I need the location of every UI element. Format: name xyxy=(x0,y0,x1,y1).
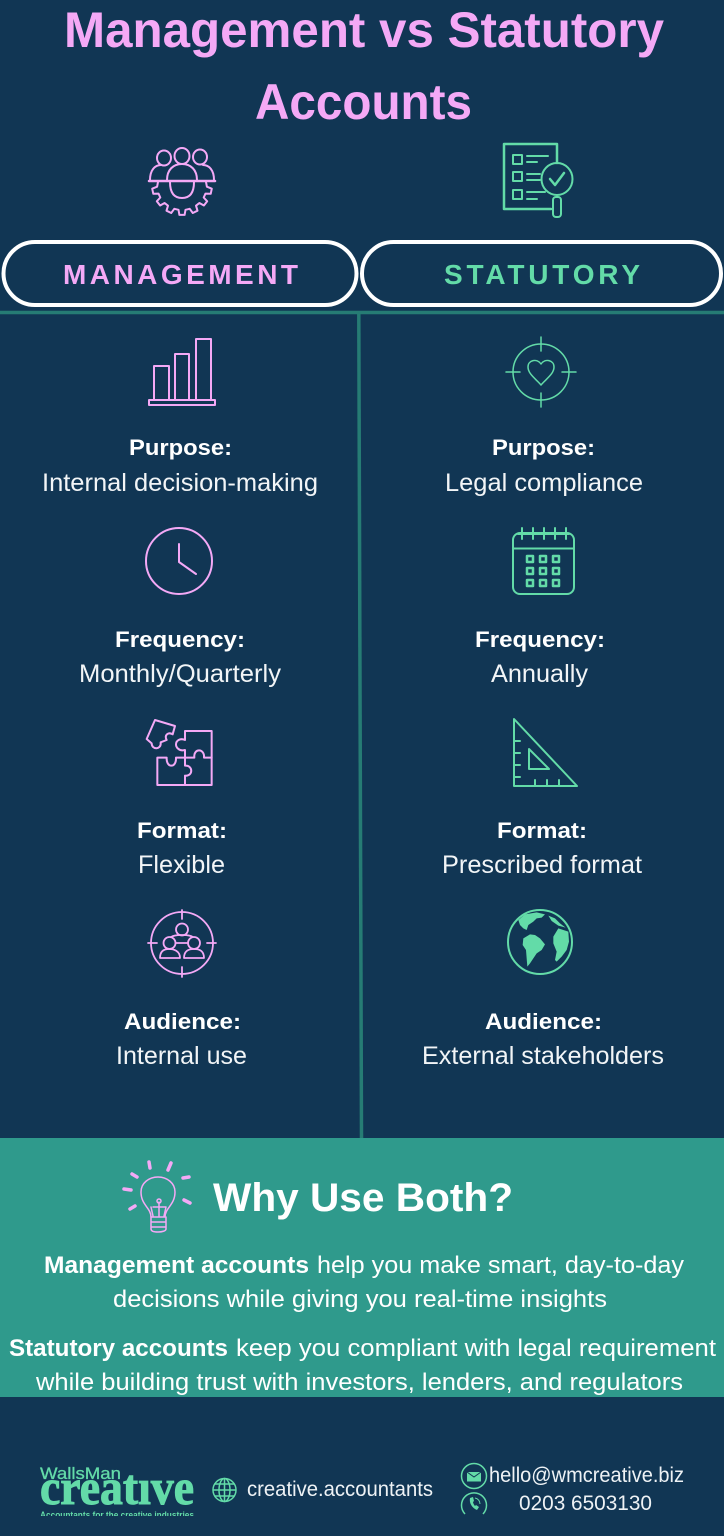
text: management frequency xyxy=(79,627,282,688)
text: statutory accounts: keep you compliant with legal requirement xyxy=(236,1335,716,1362)
text: phone number: 0203 6503130 xyxy=(519,1492,652,1515)
icon: light bulb xyxy=(124,1162,190,1232)
text: statutory format: Prescribed format xyxy=(442,851,642,879)
icon: clock xyxy=(146,528,212,594)
text: management audience: Internal use xyxy=(116,1042,247,1070)
logo: wallsman creative: creative xyxy=(40,1459,194,1515)
pill: statutory: STATUTORY xyxy=(444,259,640,290)
icon: mail xyxy=(462,1464,486,1488)
text: statutory audience xyxy=(422,1009,664,1070)
title xyxy=(64,2,664,130)
pill: management xyxy=(4,242,356,305)
text: management audience xyxy=(116,1009,247,1070)
icon: bar chart xyxy=(149,339,215,405)
icon: phone xyxy=(461,1493,486,1514)
text: statutory accounts xyxy=(9,1335,716,1396)
icon: set square xyxy=(514,719,577,786)
icon: globe xyxy=(508,910,572,974)
panel: why use both xyxy=(0,1138,724,1397)
icon: audience target xyxy=(148,910,216,977)
text: statutory format xyxy=(442,818,642,879)
text: statutory frequency: Annually xyxy=(491,660,588,688)
text: management accounts xyxy=(44,1252,685,1313)
text: management format xyxy=(137,818,227,879)
text: management format: Flexible xyxy=(138,851,225,879)
text: statutory audience: External stakeholders xyxy=(422,1042,664,1070)
text: management purpose xyxy=(42,435,318,497)
text: email: hello@wmcreative.biz xyxy=(489,1464,684,1487)
icon: web globe xyxy=(213,1478,236,1502)
text: statutory purpose: Purpose: xyxy=(492,435,595,460)
text: statutory purpose: Legal compliance xyxy=(445,469,643,497)
text: statutory purpose xyxy=(445,435,643,497)
text: management purpose: Internal decision-making xyxy=(42,469,318,497)
text: management purpose: Purpose: xyxy=(129,435,232,460)
text: statutory format: Format: xyxy=(497,818,587,843)
icon: heart target xyxy=(506,337,576,407)
text: management accounts: help you make smart, day-to-day xyxy=(317,1252,685,1279)
text: management accounts: decisions while giving you real-time insights xyxy=(113,1286,607,1313)
logo: wallsman creative: Accountants for the creative industries xyxy=(40,1510,194,1520)
text: management frequency: Frequency: xyxy=(115,627,245,652)
icon: calendar xyxy=(513,528,574,594)
pill: statutory xyxy=(362,242,721,305)
text: management audience: Audience: xyxy=(124,1009,241,1034)
icon: team and gear xyxy=(149,148,215,215)
text: management accounts: Management accounts xyxy=(44,1252,309,1279)
icon: puzzle xyxy=(147,720,212,785)
pill: management: MANAGEMENT xyxy=(63,259,298,290)
text: website: creative.accountants xyxy=(247,1478,433,1501)
text: statutory frequency xyxy=(475,627,605,688)
text: statutory accounts: while building trust with investors, lenders, and regulators xyxy=(35,1369,683,1396)
icon: checklist with magnifier xyxy=(504,144,572,217)
heading: why use both: Why Use Both? xyxy=(213,1176,513,1220)
logo: wallsman creative: WallsMan xyxy=(40,1464,121,1483)
title: Management vs Statutory xyxy=(64,2,664,58)
text: statutory audience: Audience: xyxy=(485,1009,602,1034)
text: management format: Format: xyxy=(137,818,227,843)
text: statutory accounts: Statutory accounts xyxy=(9,1335,228,1362)
text: statutory frequency: Frequency: xyxy=(475,627,605,652)
text: management frequency: Monthly/Quarterly xyxy=(79,660,282,688)
title: Accounts xyxy=(255,74,472,130)
